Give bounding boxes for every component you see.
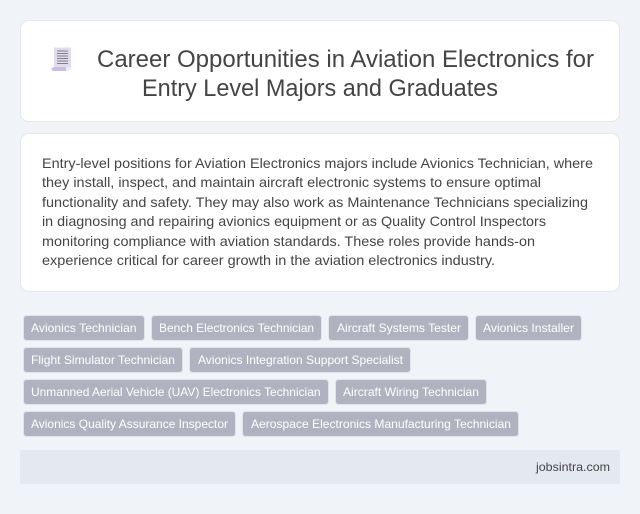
- text block: description: they install, inspect, and maintain aircraft electronic systems to ensure optimal: [42, 174, 541, 190]
- title: Career Opportunities in Aviation Electronics for: [97, 46, 594, 73]
- panel: description card: [20, 134, 620, 292]
- text block: description: monitoring compliance with aviation standards. These roles provide hands-on: [42, 233, 535, 249]
- panel: job title tags: [24, 316, 582, 436]
- footer source text: jobsintra.com: [535, 460, 610, 474]
- tag: [242, 412, 518, 436]
- tag: Unmanned Aerial Vehicle (UAV) Electronics Technician: [31, 385, 320, 399]
- tag: Avionics Technician: [31, 321, 136, 335]
- text block: description: functionality and safety. They may also work as Maintenance Technicians specializing: [42, 194, 588, 210]
- tag: Avionics Installer: [483, 321, 574, 335]
- title: [97, 46, 594, 102]
- tag: Aerospace Electronics Manufacturing Technician: [251, 417, 511, 431]
- tag: [24, 412, 236, 436]
- tag: [152, 316, 322, 340]
- tag: [24, 348, 182, 372]
- tag: Aircraft Wiring Technician: [343, 385, 479, 399]
- text block: description: Entry-level positions for Aviation Electronics majors include Avionics Technician, where: [42, 155, 593, 171]
- tag: [476, 316, 582, 340]
- tag: [328, 316, 468, 340]
- text block: description: [42, 155, 593, 268]
- tag: Aircraft Systems Tester: [337, 321, 461, 335]
- tag: [24, 380, 328, 404]
- title: Entry Level Majors and Graduates: [142, 75, 498, 102]
- tag: Bench Electronics Technician: [159, 321, 314, 335]
- tag: Avionics Integration Support Specialist: [198, 353, 404, 367]
- tag: Avionics Quality Assurance Inspector: [31, 417, 228, 431]
- tag: [24, 316, 144, 340]
- tag: Flight Simulator Technician: [31, 353, 175, 367]
- text block: description: experience critical for career growth in the aviation electronics industry.: [42, 252, 495, 268]
- panel: header card: [20, 20, 620, 122]
- text block: description: in diagnosing and repairing avionics equipment or as Quality Control Inspectors: [42, 213, 546, 229]
- footer bar: [20, 450, 620, 484]
- icon: document receipt: [52, 48, 71, 71]
- tag: [336, 380, 486, 404]
- tag: [190, 348, 410, 372]
